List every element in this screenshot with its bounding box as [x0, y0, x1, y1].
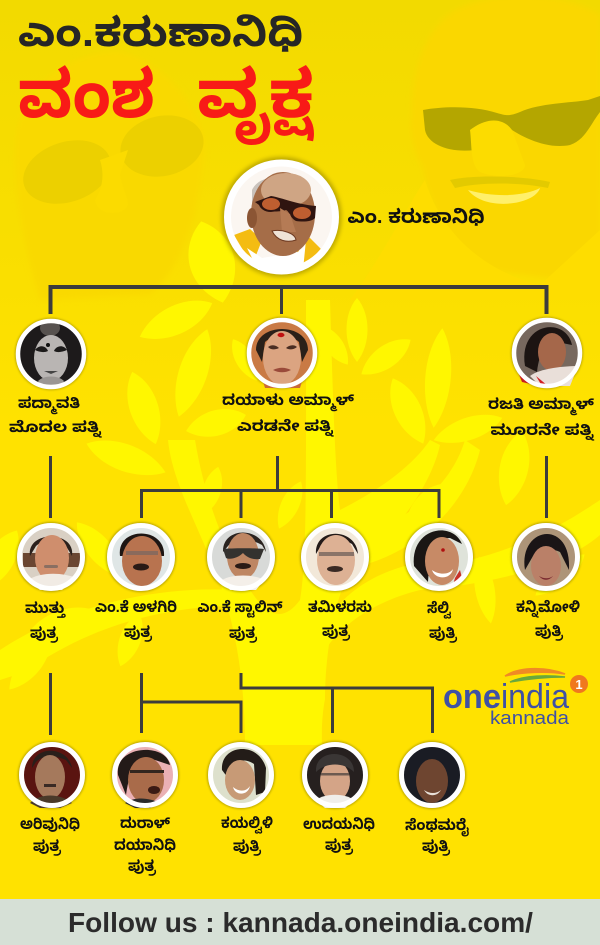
person: Selvi: ಸೆಲ್ವಿ — [427, 600, 452, 619]
background: faded portrait right — [350, 0, 600, 300]
person: Muthu: ಪುತ್ರ — [30, 625, 59, 643]
footer: Follow us : kannada.oneindia.com/ — [68, 907, 533, 938]
person: Padmavathi: ಮೊದಲ ಪತ್ನಿ — [9, 419, 102, 438]
logo: oneindia kannada: one — [443, 678, 501, 716]
footer — [0, 899, 600, 945]
person: Durai Dayanidhi: ದುರಾಳ್ — [120, 815, 171, 832]
person: Tamilarasu — [300, 522, 372, 641]
logo: oneindia kannada: 1 — [575, 677, 583, 692]
person: Udhayanidhi — [301, 741, 375, 855]
person: M.K. Alagiri — [95, 522, 177, 642]
person: Arivunidhi: ಅರಿವುನಿಧಿ — [20, 816, 80, 833]
background: tree leaves — [0, 216, 600, 745]
person: Udhayanidhi: ಪುತ್ರ — [325, 837, 354, 855]
background: faded portrait left — [15, 52, 209, 300]
person: Kayalvizhi: ಪುತ್ರಿ — [233, 838, 262, 856]
person: Selvi — [404, 522, 474, 643]
person: Muthu — [16, 522, 86, 643]
person: M.K. Stalin: ಪುತ್ರ — [229, 625, 258, 643]
person: Durai Dayanidhi — [111, 741, 179, 876]
person: Rajathi Ammal — [488, 317, 595, 441]
person: Udhayanidhi: ಉದಯನಿಧಿ — [303, 816, 375, 833]
person: Durai Dayanidhi: ದಯಾನಿಧಿ — [114, 837, 176, 854]
person: M.K. Stalin — [198, 522, 283, 643]
person: Arivunidhi: ಪುತ್ರ — [33, 838, 62, 856]
person: Kanimozhi — [511, 522, 581, 641]
logo: oneindia kannada: india — [501, 678, 569, 716]
person: Rajathi Ammal: ಮೂರನೇ ಪತ್ನಿ — [490, 422, 595, 441]
person: M.K. Alagiri: ಎಂ.ಕೆ ಅಳಗಿರಿ — [95, 599, 177, 616]
title: ಎಂ.ಕರುಣಾನಿಧಿ — [18, 11, 303, 55]
person: Arivunidhi — [18, 741, 86, 856]
person: Selvi: ಪುತ್ರಿ — [429, 625, 458, 643]
person: Muthu: ಮುತ್ತು — [25, 600, 66, 618]
connectors: family tree lines — [50, 287, 546, 735]
background: lower right darker patch — [322, 626, 600, 745]
subtitle: ವೃಕ್ಷ — [197, 57, 314, 145]
name: M. Karunanidhi: ಎಂ. ಕರುಣಾನಿಧಿ — [348, 207, 484, 228]
person: Senthamarai — [398, 741, 469, 856]
person: Rajathi Ammal: ರಜತಿ ಅಮ್ಮಾಳ್ — [488, 396, 595, 416]
person: Kanimozhi: ಕನ್ನಿಮೋಳಿ — [516, 599, 580, 618]
person: M.K. Stalin: ಎಂ.ಕೆ ಸ್ಟಾಲಿನ್ — [198, 599, 283, 618]
subtitle — [18, 57, 314, 145]
person: Tamilarasu: ಪುತ್ರ — [322, 623, 351, 641]
portrait: M. Karunanidhi — [222, 157, 342, 277]
person: Dayalu Ammal: ಎರಡನೇ ಪತ್ನಿ — [237, 418, 334, 437]
person: Senthamarai: ಪುತ್ರಿ — [422, 838, 451, 856]
person: Durai Dayanidhi: ಪುತ್ರ — [128, 858, 157, 876]
person: Kayalvizhi — [207, 741, 275, 856]
person: Senthamarai: ಸೆಂಥಮರೈ — [405, 817, 469, 837]
person: Dayalu Ammal: ದಯಾಳು ಅಮ್ಮಾಳ್ — [222, 392, 355, 412]
subtitle: ವಂಶ — [18, 57, 155, 131]
logo: oneindia kannada — [443, 669, 588, 728]
person: Dayalu Ammal — [222, 317, 355, 437]
person: Padmavathi — [9, 318, 102, 438]
person: Kayalvizhi: ಕಯಲ್ವಿಳಿ — [221, 815, 273, 834]
person: Tamilarasu: ತಮಿಳರಸು — [308, 599, 372, 616]
logo: oneindia kannada: kannada — [490, 708, 570, 728]
person: Padmavathi: ಪದ್ಮಾವತಿ — [18, 395, 80, 415]
person: Kanimozhi: ಪುತ್ರಿ — [535, 623, 564, 641]
person: M.K. Alagiri: ಪುತ್ರ — [124, 624, 153, 642]
